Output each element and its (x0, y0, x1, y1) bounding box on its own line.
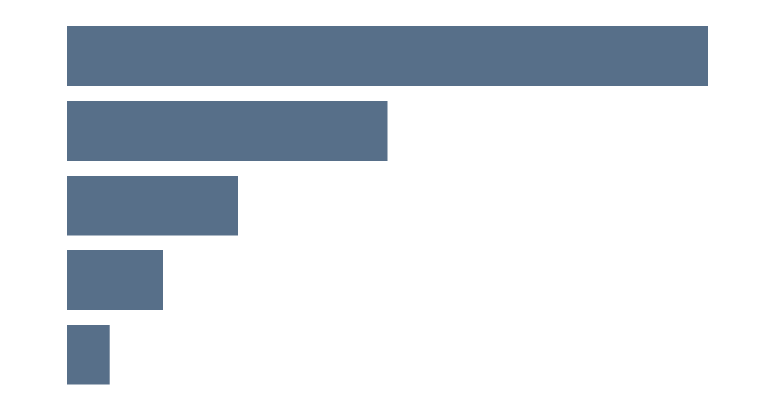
bar 3 (67, 176, 238, 236)
bar 5 (67, 325, 110, 384)
bar 4 (67, 250, 163, 310)
bar 1 (67, 26, 708, 86)
bar 2 (67, 101, 388, 161)
